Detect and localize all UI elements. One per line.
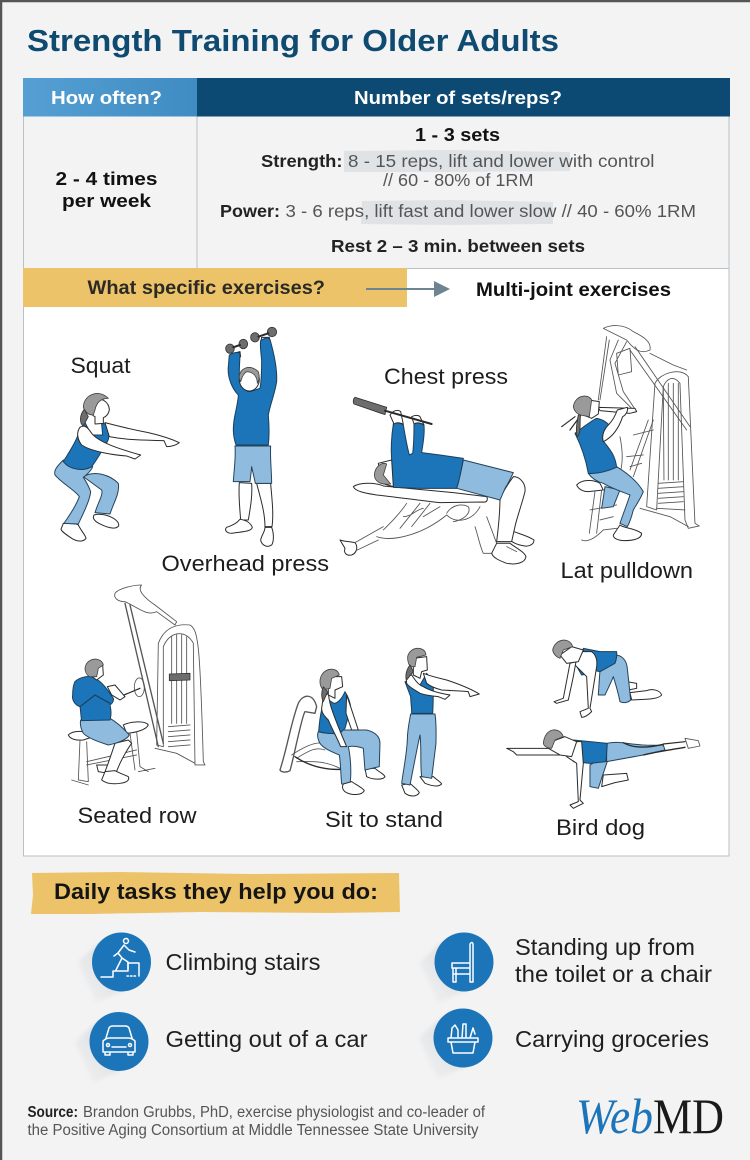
exercise: chest press: Chest press (384, 364, 508, 389)
header: how often (23, 78, 197, 116)
source note: Source: (28, 1104, 78, 1121)
illustration: lat pulldown (562, 326, 699, 541)
icon: grocery basket (419, 1008, 492, 1079)
heading: multi-joint exercises: Multi-joint exercises (476, 280, 671, 301)
task: carrying groceries (419, 1008, 709, 1079)
exercise: seated row (68, 585, 205, 828)
task: getting out of a car: Getting out of a car (166, 1026, 368, 1052)
task: climbing stairs: Climbing stairs (166, 949, 320, 975)
shorts (457, 460, 513, 500)
exercise: chest press (340, 364, 534, 564)
torso (72, 677, 113, 721)
leg (105, 740, 132, 775)
exercise: squat: Squat (70, 353, 130, 378)
text: strength guidance (261, 150, 654, 190)
text: strength guidance: // 60 - 80% of 1RM (383, 170, 534, 190)
task: carrying groceries: Carrying groceries (515, 1026, 709, 1052)
source note (28, 1104, 486, 1139)
text: power guidance (220, 200, 696, 225)
near leg (613, 525, 642, 541)
machine (115, 585, 177, 625)
machine (603, 326, 650, 352)
illustration: seated row (68, 585, 205, 785)
shorts (80, 718, 129, 745)
stool (68, 731, 93, 740)
header: number of sets/reps: Number of sets/reps? (354, 87, 562, 108)
legs (508, 530, 534, 546)
text: rest: Rest 2 – 3 min. between sets (331, 236, 585, 256)
icon: climbing stairs (78, 932, 151, 1003)
exercise: squat (55, 353, 179, 541)
exercise: lat pulldown (560, 326, 699, 583)
arrow (366, 281, 450, 297)
illustration: bird dog top position (553, 640, 662, 717)
panel: exercises (24, 268, 729, 856)
text: frequency (56, 168, 158, 211)
head (583, 400, 599, 418)
text: power guidance: Power: (220, 201, 280, 221)
logo: WebMD: MD (653, 1088, 724, 1144)
task: getting out of a car (75, 1012, 368, 1083)
torso and arms (391, 423, 463, 488)
logo: WebMD: Web (576, 1088, 653, 1144)
banner: daily tasks (31, 872, 400, 914)
hands (390, 410, 403, 424)
icon: car (75, 1012, 148, 1083)
illustration: bird dog extended position (507, 730, 700, 808)
illustration: standing figure (402, 648, 479, 796)
barbell (353, 397, 387, 415)
header: number of sets/reps (197, 78, 730, 116)
exercise: bird dog (507, 640, 700, 840)
exercise: lat pulldown: Lat pulldown (560, 558, 693, 583)
task: standing up from the toilet or a chair: the toilet or a chair (515, 961, 712, 987)
text: sets: 1 - 3 sets (415, 124, 500, 145)
task: standing up from the toilet or a chair (420, 932, 712, 1003)
text: frequency: per week (62, 190, 152, 211)
exercise: sit to stand: Sit to stand (325, 807, 443, 832)
illustration: squat (55, 393, 179, 541)
banner: daily tasks: Daily tasks they help you do: (54, 879, 378, 904)
header: how often: How often? (51, 87, 162, 108)
text: frequency: 2 - 4 times (56, 168, 158, 189)
source note: Brandon Grubbs, PhD, exercise physiologist and co-leader of (83, 1104, 486, 1121)
head (90, 665, 103, 680)
exercise: bird dog: Bird dog (556, 815, 645, 840)
stool (577, 480, 603, 492)
source note: the Positive Aging Consortium at Middle Tennessee State University (28, 1122, 479, 1139)
task: standing up from the toilet or a chair: Standing up from (515, 934, 695, 960)
illustration: chest press (340, 397, 534, 564)
task: climbing stairs (78, 932, 320, 1003)
exercise: seated row: Seated row (78, 803, 197, 828)
bench (340, 540, 357, 555)
text: power guidance: 3 - 6 reps, lift fast and lower slow // 40 - 60% 1RM (286, 201, 696, 221)
text: strength guidance: 8 - 15 reps, lift and lower with control (348, 151, 654, 171)
illustration: seated figure on chair (280, 669, 385, 795)
hands (107, 685, 125, 700)
text: strength guidance: Strength: (261, 151, 342, 171)
torso (575, 418, 617, 473)
banner: what specific exercises (23, 268, 407, 307)
title: Strength Training for Older Adults (27, 23, 559, 58)
exercise: overhead press: Overhead press (162, 551, 329, 576)
far leg (602, 487, 620, 508)
exercise: sit to stand (280, 648, 479, 832)
icon: chair (420, 932, 494, 1003)
head (378, 460, 393, 487)
arms (598, 407, 637, 413)
far foot (97, 765, 110, 773)
exercise: overhead press (162, 327, 329, 576)
illustration: overhead press (226, 327, 277, 546)
banner: what specific exercises: What specific exercises? (88, 278, 325, 299)
panel: frequency and sets table (23, 78, 730, 269)
logo: WebMD (576, 1088, 724, 1144)
